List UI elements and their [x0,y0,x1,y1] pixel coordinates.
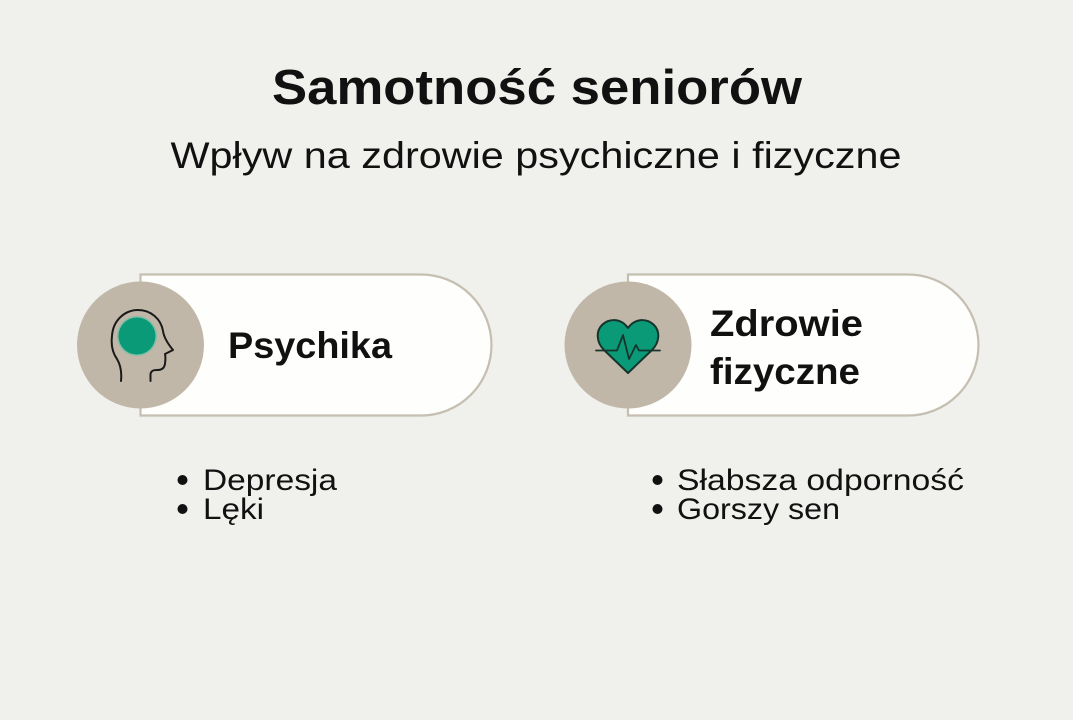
pill: zdrowie fizyczne [628,274,978,416]
list: psychika: Depresja [203,464,337,497]
title: Samotność seniorów [272,61,803,115]
list: psychika [178,464,337,526]
heading: zdrowie fizyczne: fizyczne [710,351,860,392]
heading: zdrowie fizyczne: Zdrowie [710,303,863,344]
list: zdrowie fizyczne [652,464,964,526]
list: psychika: Lęki [203,493,264,526]
list: zdrowie fizyczne: Gorszy sen [677,493,840,526]
icon: head with green circle [112,310,173,381]
panel: psychika [77,274,491,416]
panel: zdrowie fizyczne [564,274,978,416]
heading: psychika: Psychika [228,325,392,366]
icon circle: zdrowie fizyczne [564,282,692,408]
subtitle: Wpływ na zdrowie psychiczne i fizyczne [170,135,902,176]
list: zdrowie fizyczne: Słabsza odporność [677,464,964,497]
icon circle: psychika [77,282,204,408]
icon: heart with pulse [596,320,660,373]
pill: psychika [140,274,491,416]
